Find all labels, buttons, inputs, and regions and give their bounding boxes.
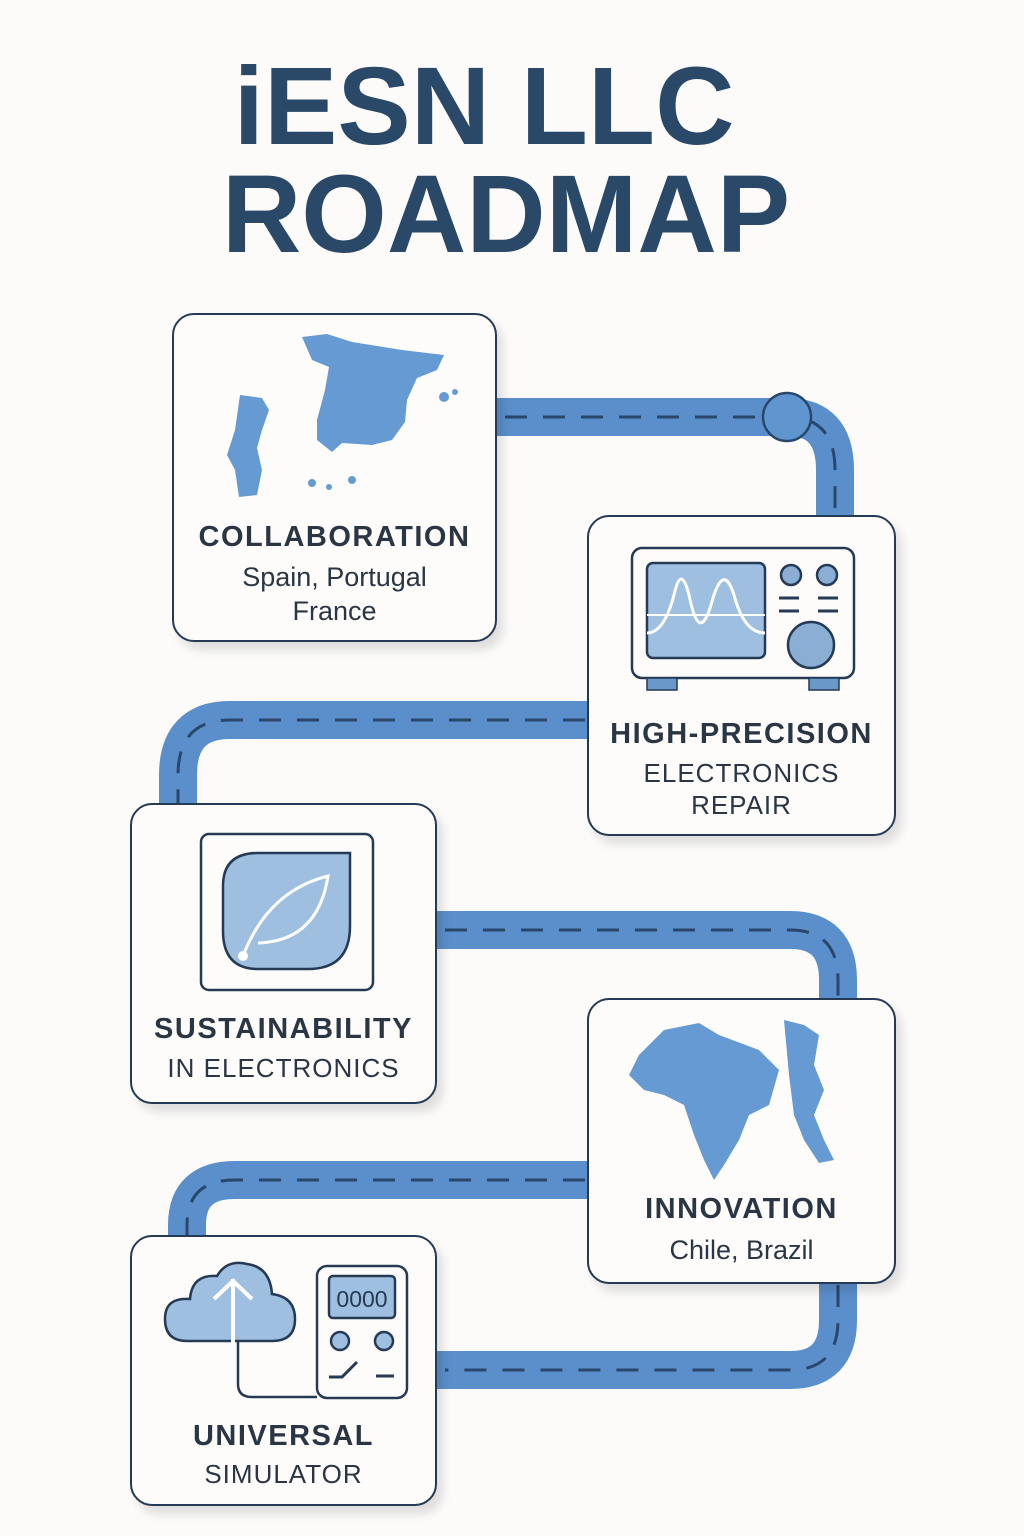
text: Chile, Brazil [669, 1235, 814, 1265]
panel: sustainability [130, 803, 437, 1104]
text: IN ELECTRONICS [167, 1053, 400, 1083]
panel: collaboration [172, 313, 497, 642]
text [644, 758, 839, 820]
text: Spain, Portugal [242, 562, 427, 592]
heading: HIGH-PRECISION [610, 718, 873, 750]
title [222, 45, 790, 276]
text [242, 562, 427, 626]
heading: SUSTAINABILITY [154, 1013, 413, 1045]
road node [763, 393, 811, 441]
panel: simulator [130, 1235, 437, 1506]
heading: COLLABORATION [199, 521, 470, 553]
panel: innovation [587, 998, 896, 1284]
title: ROADMAP [222, 153, 790, 276]
text: France [292, 596, 377, 626]
icon: cloud and meter [164, 1262, 408, 1400]
text: SIMULATOR [204, 1459, 363, 1489]
icon: oscilloscope [630, 546, 856, 691]
icon: south america map [629, 1020, 834, 1180]
heading: INNOVATION [645, 1193, 838, 1225]
text: REPAIR [691, 790, 792, 820]
icon: cloud and meter: 0000 [336, 1286, 388, 1312]
icon: iberia map [227, 334, 458, 497]
heading: UNIVERSAL [193, 1420, 374, 1452]
panel: repair [587, 515, 896, 836]
text: ELECTRONICS [644, 758, 839, 788]
icon: leaf [200, 832, 374, 992]
title: iESN LLC [233, 45, 735, 168]
